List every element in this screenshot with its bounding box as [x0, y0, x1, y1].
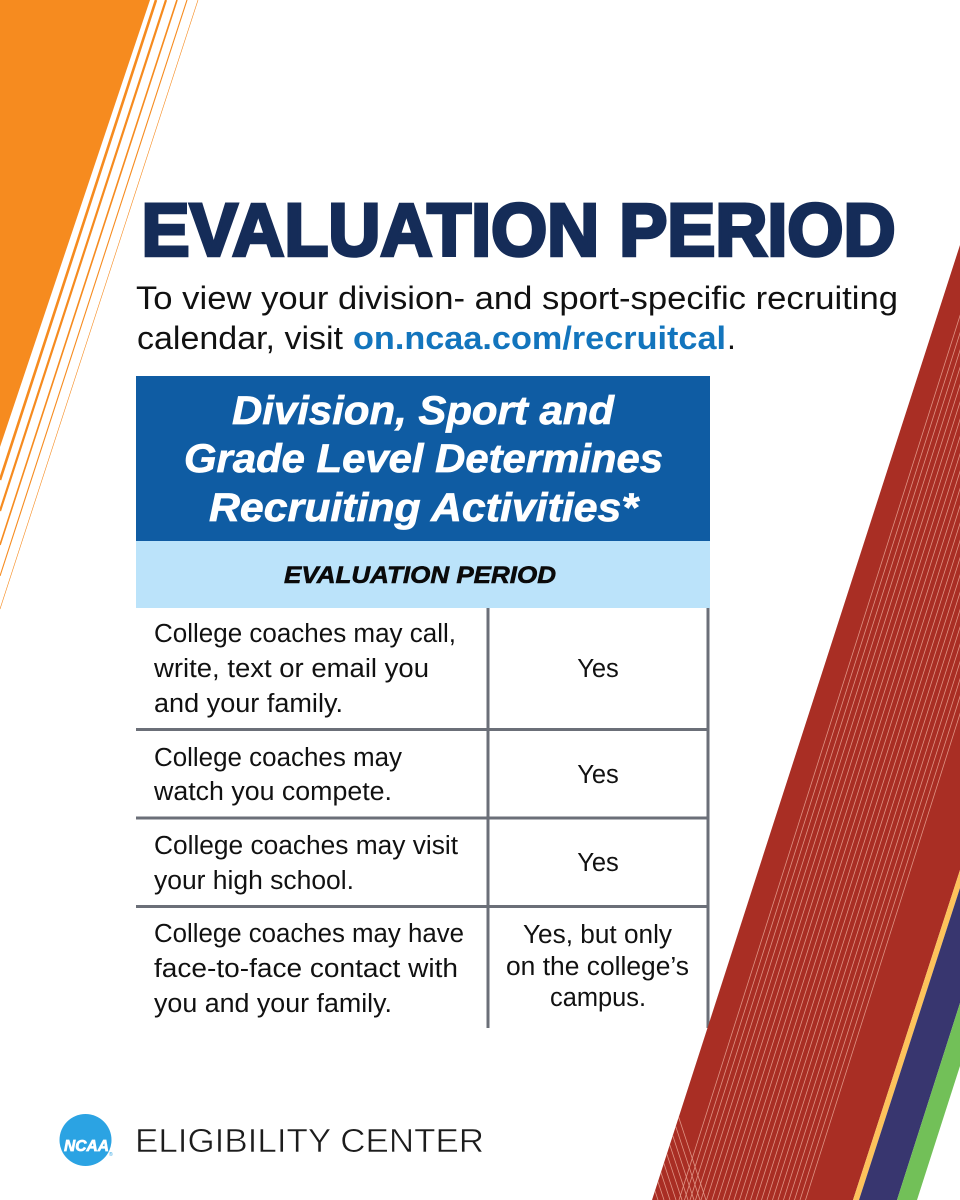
row 3: College coaches may visit: [154, 832, 458, 860]
row 1: Yes: [577, 655, 619, 683]
row 4: [154, 920, 689, 1018]
table header: Grade Level Determines: [184, 437, 663, 481]
table subheader: EVALUATION PERIOD: [284, 562, 556, 589]
table grid: [136, 608, 710, 1028]
table header: [136, 376, 710, 541]
table header: Division, Sport and: [232, 389, 616, 433]
icon: NCAA circle: NCAA: [64, 1138, 109, 1155]
decoration: red and coloured stripes: [652, 245, 960, 1200]
row 2: watch you compete.: [153, 778, 392, 806]
row 4: face-to-face contact with: [154, 955, 458, 983]
row 1: and your family.: [154, 690, 343, 718]
table header: Recruiting Activities*: [209, 486, 641, 530]
row 4: campus.: [550, 984, 646, 1012]
row 4: College coaches may have: [154, 920, 464, 948]
logo wordmark: ELIGIBILITY CENTER: [135, 1122, 484, 1159]
row 3: [154, 832, 619, 895]
row 3: your high school.: [154, 867, 354, 895]
intro text: calendar, visit: [137, 320, 343, 356]
table subheader: [136, 541, 710, 608]
row 2: College coaches may: [154, 744, 402, 772]
intro text: To view your division- and sport-specific recruiting: [136, 280, 898, 316]
row 1: College coaches may call,: [154, 620, 456, 648]
icon: NCAA circle: [60, 1114, 113, 1166]
intro text: .: [727, 320, 736, 356]
table: [136, 376, 710, 1028]
decoration: orange wedge with stripes: [0, 0, 198, 609]
row 4: you and your family.: [154, 990, 392, 1018]
row 2: Yes: [577, 761, 619, 789]
title: EVALUATION PERIOD: [142, 188, 896, 272]
link: on.ncaa.com/recruitcal: [353, 320, 726, 356]
row 3: Yes: [577, 849, 619, 877]
row 4: Yes, but only: [523, 921, 672, 949]
intro text: [136, 280, 898, 356]
logo: NCAA Eligibility Center: [60, 1114, 484, 1166]
icon: NCAA circle: ®: [109, 1151, 113, 1158]
row 2: [153, 744, 619, 806]
row 1: [153, 620, 619, 718]
row 4: on the college’s: [506, 953, 689, 981]
row 1: write, text or email you: [153, 655, 429, 683]
